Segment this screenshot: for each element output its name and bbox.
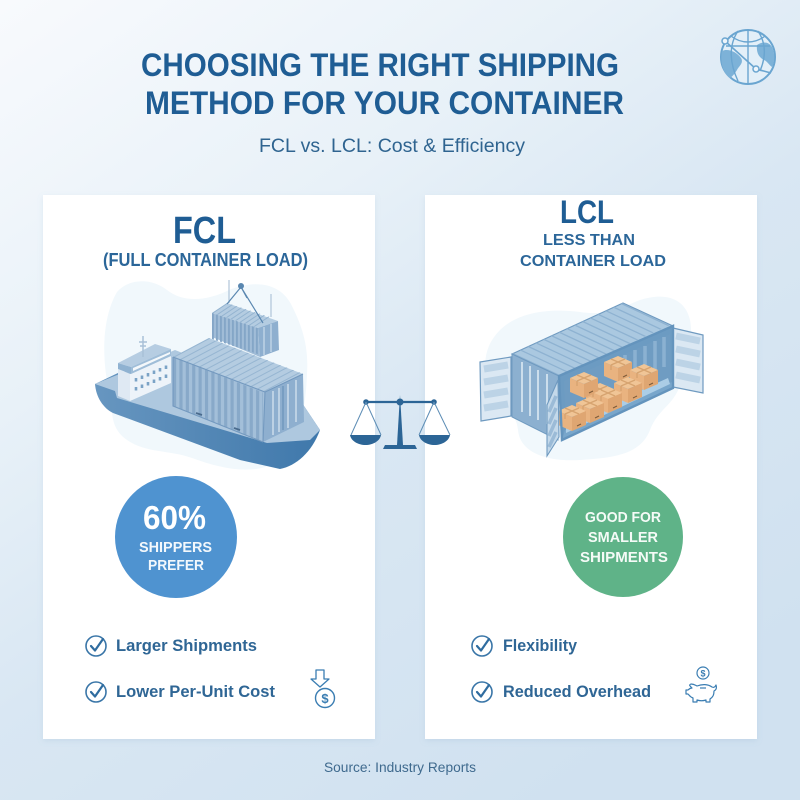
container closed end [512,354,559,440]
stat circle: 60%: SHIPPERS [139,539,212,556]
hull [95,372,320,469]
subheading: full container load: (FULL CONTAINER LOAD) [103,250,308,270]
illustration: container ship [95,280,320,470]
heading: FCL: FCL [173,210,236,252]
title: METHOD FOR YOUR CONTAINER [145,85,624,121]
subtitle: FCL vs. LCL: Cost & Efficiency [259,136,526,157]
container interior [559,326,673,440]
icon: piggy bank [686,667,716,702]
container floor [562,382,672,440]
icon: globe [721,30,775,84]
icon: down arrow and dollar coin: $ [321,691,329,706]
illustration: open container with boxes [480,297,703,460]
stat circle: good for smaller shipments: SMALLER [588,529,658,546]
cardboard boxes [558,356,658,431]
stat circle: good for smaller shipments: SHIPMENTS [580,549,668,566]
stat circle: good for smaller shipments [563,477,683,597]
open door [547,380,559,456]
list item: flexibility [472,636,578,656]
subheading: less than container load: CONTAINER LOAD [520,253,666,270]
list item: reduced overhead: Reduced Overhead [503,682,651,701]
stat circle: good for smaller shipments: GOOD FOR [585,509,661,526]
right door [673,328,703,393]
blob backdrop [485,297,691,460]
subheading: less than container load [520,232,666,270]
icon: balance scale [350,395,450,449]
left door [480,357,511,421]
lifted container [212,280,279,357]
panel: LCL [425,194,757,739]
container top [512,303,673,376]
heading: LCL: LCL [560,194,614,230]
list item: lower per-unit cost: Lower Per-Unit Cost [116,682,275,701]
title: CHOOSING THE RIGHT SHIPPING [141,47,619,83]
stat circle: 60%: 60% [143,499,206,536]
panel background: FCL card [43,195,375,739]
superstructure [118,336,171,401]
icon: down arrow and dollar coin [311,670,334,708]
panel: FCL [43,195,375,739]
stat circle: 60% [115,476,237,598]
large container [173,338,304,442]
subheading: less than container load: LESS THAN [543,232,635,249]
list item: larger shipments: Larger Shipments [116,636,257,655]
list item: flexibility: Flexibility [503,636,578,655]
panel background: LCL card [425,195,757,739]
stat circle: 60%: PREFER [148,557,204,574]
blob backdrop [104,281,307,470]
title [141,47,624,121]
icon: piggy bank: $ [700,668,706,678]
source note: Source: Industry Reports [324,760,476,775]
frame [559,326,673,440]
deck [95,350,320,443]
